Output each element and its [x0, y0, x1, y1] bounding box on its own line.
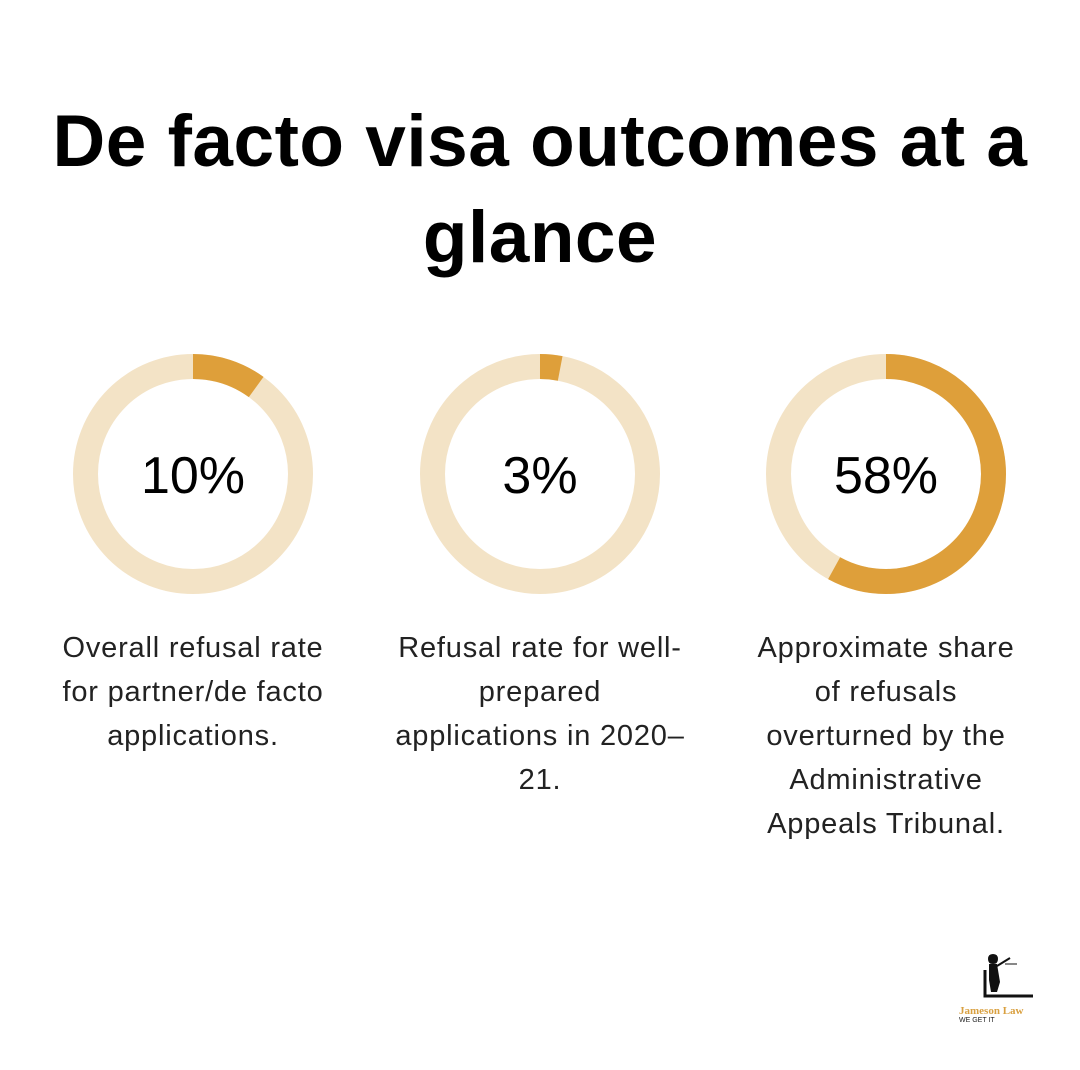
caption 3: [758, 632, 1014, 840]
caption 2: Refusal rate for well-: [398, 632, 682, 664]
text: WE GET IT: [959, 1017, 995, 1024]
caption 1: Overall refusal rate: [62, 632, 324, 664]
caption 3: overturned by the: [766, 720, 1006, 752]
caption 2: 21.: [519, 764, 561, 796]
caption 2: prepared: [479, 676, 601, 708]
title: glance: [423, 197, 657, 278]
caption 1: applications.: [107, 720, 279, 752]
caption 1: for partner/de facto: [62, 676, 324, 708]
caption 3: Approximate share: [758, 632, 1014, 664]
caption 3: of refusals: [815, 676, 957, 708]
title: De facto visa outcomes at a: [52, 101, 1028, 182]
caption 2: [395, 632, 685, 796]
donut: 10%: [86, 366, 300, 582]
logo text: Jameson Law: [959, 1005, 1023, 1017]
value: 10%: 10%: [141, 447, 245, 505]
caption 3: Appeals Tribunal.: [767, 808, 1005, 840]
donut: 3%: [432, 366, 648, 582]
caption 1: [62, 632, 324, 752]
value: 3%: 3%: [502, 447, 578, 505]
icon: lady justice: [984, 954, 1033, 998]
value: 58%: 58%: [834, 447, 938, 505]
caption 3: Administrative: [789, 764, 983, 796]
title: [52, 101, 1028, 278]
caption 2: applications in 2020–: [395, 720, 685, 752]
donut: 58%: [778, 366, 994, 582]
logo: [959, 954, 1033, 1024]
